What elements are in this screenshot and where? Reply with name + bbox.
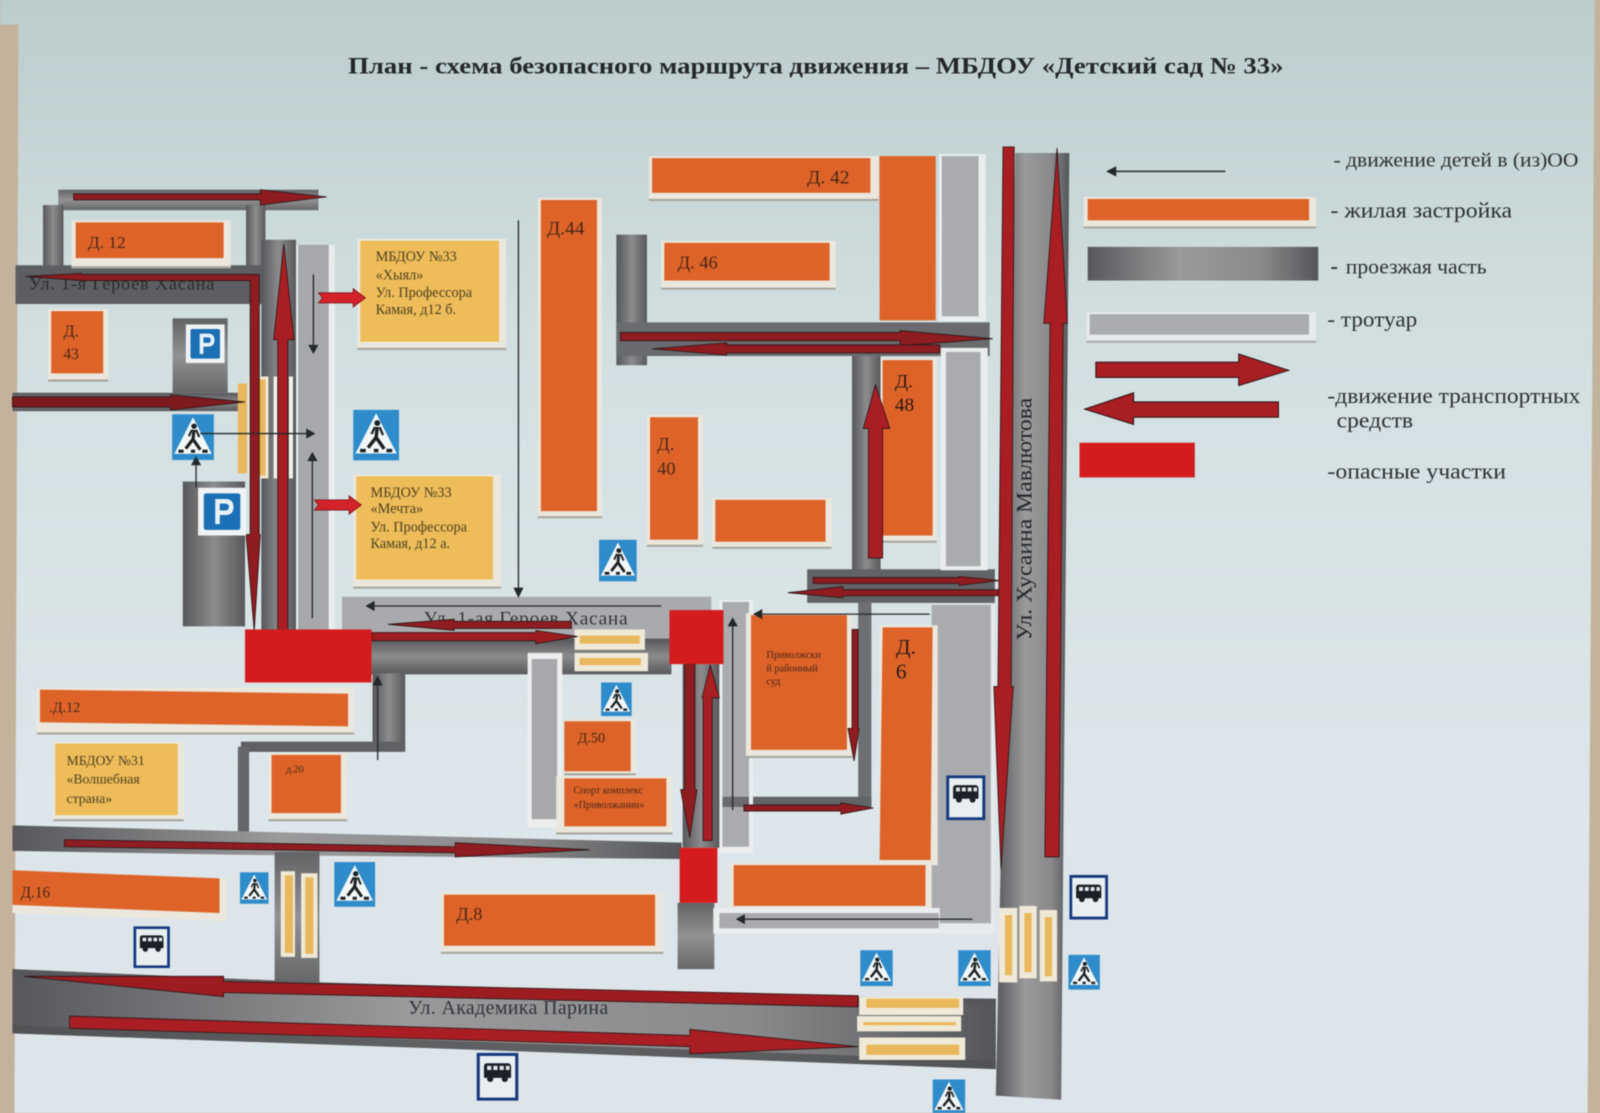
- house Д.46: [661, 241, 836, 290]
- vehicle arrows: north-east: [620, 331, 1000, 598]
- icon: bus stop Мавлютова: [1071, 876, 1107, 918]
- road: west side street: [12, 393, 238, 411]
- icon: pedestrian sign Мавлютова: [1068, 955, 1100, 990]
- building: МБДОУ №33 Мечта: Камая, д12 а.: [371, 536, 450, 552]
- pedestrian crossing: Парина: [857, 997, 965, 1060]
- building: МБДОУ №33 Хыял: Ул. Профессора: [376, 285, 473, 301]
- legend: housing: [1084, 197, 1512, 229]
- legend: vehicle movement: [1085, 354, 1580, 432]
- red zone: junction west: [245, 629, 372, 682]
- children movement arrows: left block: [191, 274, 318, 618]
- building: МБДОУ №31: [53, 742, 184, 821]
- entry arrows to kindergarten: [314, 289, 365, 514]
- red zone: south-central junction: [680, 848, 717, 903]
- house Д.6: 6: [896, 659, 907, 683]
- sidewalk: central vertical: [719, 600, 753, 853]
- children movement arrows: south-east: [728, 609, 972, 924]
- vehicle arrow: westbound: [24, 976, 858, 1007]
- house Д.12 lower: [37, 688, 354, 735]
- house Д.12 top: Д. 12: [88, 233, 126, 252]
- icon: pedestrian sign left: [172, 414, 214, 460]
- house unnamed low: [712, 498, 832, 549]
- map: north-east block: [616, 154, 1000, 603]
- house Д.43: [48, 309, 108, 382]
- icon: bus stop lower-left: [135, 928, 169, 967]
- house Д.44: [538, 198, 602, 518]
- road: upper parking: [173, 318, 228, 393]
- sidewalk: east middle: [941, 348, 988, 570]
- building: МБДОУ №33 Хыял: Камая, д12 б.: [376, 302, 456, 318]
- house Д.40: Д.: [657, 434, 674, 454]
- legend: roadway: [1088, 247, 1487, 281]
- pedestrian crossing: Мавлютова: [999, 906, 1057, 982]
- building: sport complex: Спорт комплекс: [574, 786, 643, 797]
- house Д.44: Д.44: [547, 219, 585, 240]
- icon: bus stop east: [948, 777, 984, 819]
- icon: pedestrian sign central lower: [601, 682, 632, 716]
- building: МБДОУ №31: «Волшебная: [67, 771, 140, 786]
- house Д.8: Д.8: [456, 904, 483, 924]
- vehicle arrow: northbound: [1044, 148, 1067, 857]
- road: vertical connector lower: [275, 852, 320, 982]
- building: МБДОУ №33 Мечта: «Мечта»: [371, 501, 423, 517]
- pedestrian crossing: lower-left: [281, 871, 317, 958]
- house Д.43: Д.: [63, 322, 79, 341]
- road: stub to lower-left: [238, 673, 405, 832]
- vehicle arrow: southbound: [994, 147, 1014, 869]
- house unnamed tall north: [880, 156, 936, 320]
- icon: pedestrian sign lower-left big: [334, 862, 375, 907]
- house Д.12 lower: .Д.12: [49, 700, 80, 716]
- legend: [1080, 149, 1580, 483]
- map: south-east block: [12, 600, 995, 969]
- sidewalk: east lower: [932, 605, 995, 933]
- legend: dangerous areas: -опасные участки: [1327, 458, 1506, 483]
- house Д.42: Д. 42: [807, 168, 849, 189]
- house Д.16: [12, 870, 227, 921]
- icon: parking upper: [186, 324, 225, 363]
- sidewalk: north-east: [939, 154, 986, 321]
- house Д.12 top: [72, 220, 231, 268]
- icon: pedestrian sign bottom: [933, 1079, 965, 1113]
- icon: parking lower: [198, 488, 246, 536]
- building: sport complex: [556, 776, 672, 834]
- road: lower parking: [183, 482, 245, 626]
- building: sport complex: «Приволжанин»: [574, 800, 644, 811]
- building: МБДОУ №33 Хыял: [357, 239, 506, 350]
- building: МБДОУ №33 Хыял: МБДОУ №33: [376, 249, 457, 265]
- house Д.6: [880, 625, 938, 865]
- icon: pedestrian sign lower-left small: [240, 872, 268, 904]
- sidewalk: vertical near Д.50: [528, 653, 562, 827]
- vehicle arrows: central: [64, 619, 590, 857]
- map: central block: [12, 198, 711, 982]
- house Д.48: [881, 358, 937, 543]
- court building: суд: [766, 677, 780, 688]
- building: МБДОУ №31: страна»: [67, 791, 112, 806]
- house д.20: д.20: [286, 764, 304, 775]
- house Д.46: Д. 46: [678, 252, 718, 272]
- icon: pedestrian sign Парина right: [958, 950, 991, 986]
- legend: dangerous areas: [1080, 443, 1506, 483]
- road: top-left loop: [43, 190, 318, 266]
- vehicle arrows: left block: [12, 190, 327, 631]
- house д.20: [268, 753, 347, 821]
- icon: pedestrian sign central upper: [599, 540, 637, 581]
- house Д.48: Д.: [895, 372, 913, 393]
- legend: roadway: проезжая часть: [1346, 254, 1487, 278]
- vehicle arrow: eastbound: [70, 1016, 858, 1054]
- title: План - схема безопасного маршрута движения – МБДОУ «Детский сад № 33»: [348, 53, 1284, 79]
- sidewalk: Ул. 1-ая Героев Хасана: [342, 597, 711, 640]
- house Д.40: [647, 415, 703, 547]
- legend: vehicle movement: -движение транспортных: [1327, 383, 1580, 408]
- road: central vertical: [683, 664, 719, 848]
- building: МБДОУ №31: МБДОУ №31: [67, 753, 145, 768]
- legend: housing: - жилая застройка: [1330, 197, 1512, 222]
- house Д.42: [649, 156, 879, 201]
- house Д.48: 48: [895, 395, 914, 416]
- building: МБДОУ №33 Мечта: МБДОУ №33: [371, 485, 452, 501]
- court building: Приволжски: [766, 650, 821, 661]
- house Д.6: Д.: [896, 635, 916, 659]
- building: МБДОУ №33 Мечта: [353, 474, 501, 589]
- house Д.8: [441, 893, 663, 954]
- road: Ул. 1-я Героев Хасана upper: Ул. 1-я Героев Хасана: [29, 274, 214, 294]
- map: upper-left block: [12, 190, 506, 631]
- icon: pedestrian sign right: [353, 410, 399, 460]
- legend: sidewalk: - тротуар: [1327, 306, 1417, 331]
- road: vertical to Мавлютова side: [852, 356, 881, 572]
- road: main vertical left: [261, 240, 296, 631]
- road: east connector: [807, 569, 995, 603]
- house Д.43: 43: [63, 346, 79, 363]
- building: МБДОУ №33 Мечта: Ул. Профессора: [371, 520, 468, 536]
- road: thin east: [715, 602, 871, 807]
- house Д.40: 40: [657, 458, 676, 478]
- sidewalk: main vertical left: [296, 245, 335, 631]
- road: Ул. 1-я Героев Хасана upper: [15, 265, 305, 304]
- icon: pedestrian sign Парина left: [860, 950, 893, 986]
- road: Ул. Академика Парина: [12, 969, 996, 1069]
- court building: й районный: [766, 663, 818, 674]
- children arrows: central: [365, 220, 661, 760]
- vehicle arrows: south-east block: [681, 629, 873, 841]
- house unnamed south: [730, 863, 932, 911]
- house Д.50: Д.50: [578, 731, 605, 747]
- legend: children movement: - движение детей в (из)ОО: [1334, 149, 1578, 171]
- legend: roadway: -: [1330, 253, 1338, 278]
- legend: vehicle movement: средств: [1337, 407, 1413, 432]
- red zone: north-central junction: [669, 610, 723, 664]
- road: Ул. Академика Парина: Ул. Академика Парина: [408, 997, 608, 1019]
- road: Ул. Хусаина Мавлютова: Ул. Хусаина Мавлютова: [1012, 398, 1037, 641]
- road: south stub: [678, 903, 714, 969]
- house Д.16: Д.16: [21, 885, 51, 902]
- road: middle connector: [372, 639, 671, 674]
- building: МБДОУ №33 Хыял: «Хыял»: [376, 268, 423, 284]
- road: Ул. Хусаина Мавлютова: [994, 147, 1069, 1100]
- road: L-shaped north: [616, 235, 990, 365]
- sidewalk: Ул. 1-ая Героев Хасана: Ул. 1-ая Героев Хасана: [424, 608, 628, 629]
- icon: bus stop Парина: [478, 1054, 517, 1099]
- legend: sidewalk: [1087, 306, 1417, 343]
- pedestrian crossing: left: [238, 376, 293, 478]
- road: lower side street: [12, 825, 682, 859]
- sidewalk: south strip: [713, 908, 940, 933]
- court building: [746, 613, 852, 758]
- pedestrian crossing: central: [575, 629, 648, 671]
- house Д.50: [564, 719, 636, 775]
- legend: children movement: [1106, 149, 1578, 176]
